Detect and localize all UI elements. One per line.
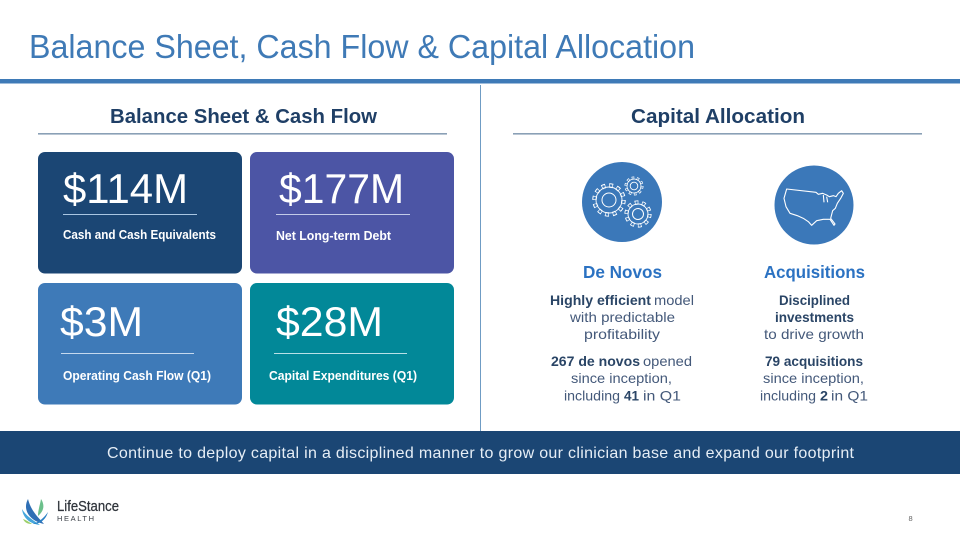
heading: capital allocation: Capital Allocation bbox=[631, 105, 805, 128]
callout banner: Continue to deploy capital in a disciplined manner to grow our clinician base and expand our footprint bbox=[107, 445, 855, 462]
text: efficient model: Highly efficient bbox=[550, 292, 651, 308]
text: de novos opened bbox=[551, 353, 692, 404]
panel: cash and cash equivalents: Cash and Cash Equivalents bbox=[63, 228, 216, 242]
text: disciplined investments: Disciplined bbox=[779, 292, 850, 308]
column divider bbox=[480, 85, 481, 431]
text: disciplined investments: to drive growth bbox=[764, 326, 864, 342]
text: efficient model: model bbox=[654, 292, 694, 308]
text: efficient model bbox=[550, 292, 694, 342]
text: acquisitions count: including bbox=[760, 388, 816, 404]
text: acquisitions count: 79 acquisitions bbox=[765, 353, 863, 369]
panel: net long-term debt: $177M bbox=[279, 165, 404, 212]
panel: operating cash flow: Operating Cash Flow (Q1) bbox=[63, 369, 211, 383]
panel: capital expenditures bbox=[250, 283, 454, 404]
title: Balance Sheet, Cash Flow & Capital Allocation bbox=[29, 28, 695, 65]
text: de novos opened: 41 bbox=[624, 388, 639, 404]
text: disciplined investments: investments bbox=[775, 309, 854, 325]
heading: balance sheet and cash flow: Balance Sheet & Cash Flow bbox=[110, 105, 377, 128]
text: acquisitions count: since inception, bbox=[763, 370, 864, 386]
panel: net long-term debt bbox=[250, 152, 454, 274]
callout banner bbox=[0, 431, 960, 474]
text: disciplined investments bbox=[764, 292, 864, 342]
text: de novos opened: 267 de novos bbox=[551, 353, 640, 369]
icon: logo leaves bbox=[22, 499, 48, 525]
column: acquisitions bbox=[760, 262, 868, 404]
column: de novos: De Novos bbox=[583, 262, 662, 282]
text: efficient model: with predictable bbox=[569, 309, 675, 325]
column: de novos bbox=[550, 262, 694, 404]
panel: operating cash flow bbox=[38, 283, 242, 404]
text: acquisitions count: in Q1 bbox=[831, 388, 868, 404]
panel: capital expenditures: $28M bbox=[276, 298, 383, 345]
logo: lifestance health: LifeStance bbox=[57, 499, 119, 515]
logo: lifestance health bbox=[22, 499, 119, 525]
logo: lifestance health: HEALTH bbox=[57, 514, 94, 523]
title rule bbox=[0, 79, 960, 84]
text: acquisitions count bbox=[760, 353, 868, 404]
panel: net long-term debt: Net Long-term Debt bbox=[276, 229, 392, 243]
text: acquisitions count: 2 bbox=[820, 388, 828, 404]
panel: operating cash flow: $3M bbox=[60, 298, 143, 345]
text: efficient model: profitability bbox=[584, 326, 660, 342]
text: de novos opened: opened bbox=[643, 353, 692, 369]
column: acquisitions: Acquisitions bbox=[764, 262, 865, 282]
page number: 8 bbox=[908, 514, 913, 523]
text: de novos opened: including bbox=[564, 388, 620, 404]
panel: cash and cash equivalents: $114M bbox=[63, 165, 188, 212]
text: de novos opened: since inception, bbox=[571, 370, 672, 386]
panel: capital expenditures: Capital Expenditures (Q1) bbox=[269, 369, 417, 383]
panel: cash and cash equivalents bbox=[38, 152, 242, 274]
icon: united states map bbox=[774, 166, 854, 244]
text: de novos opened: in Q1 bbox=[643, 388, 681, 404]
icon: gears bbox=[582, 162, 662, 242]
